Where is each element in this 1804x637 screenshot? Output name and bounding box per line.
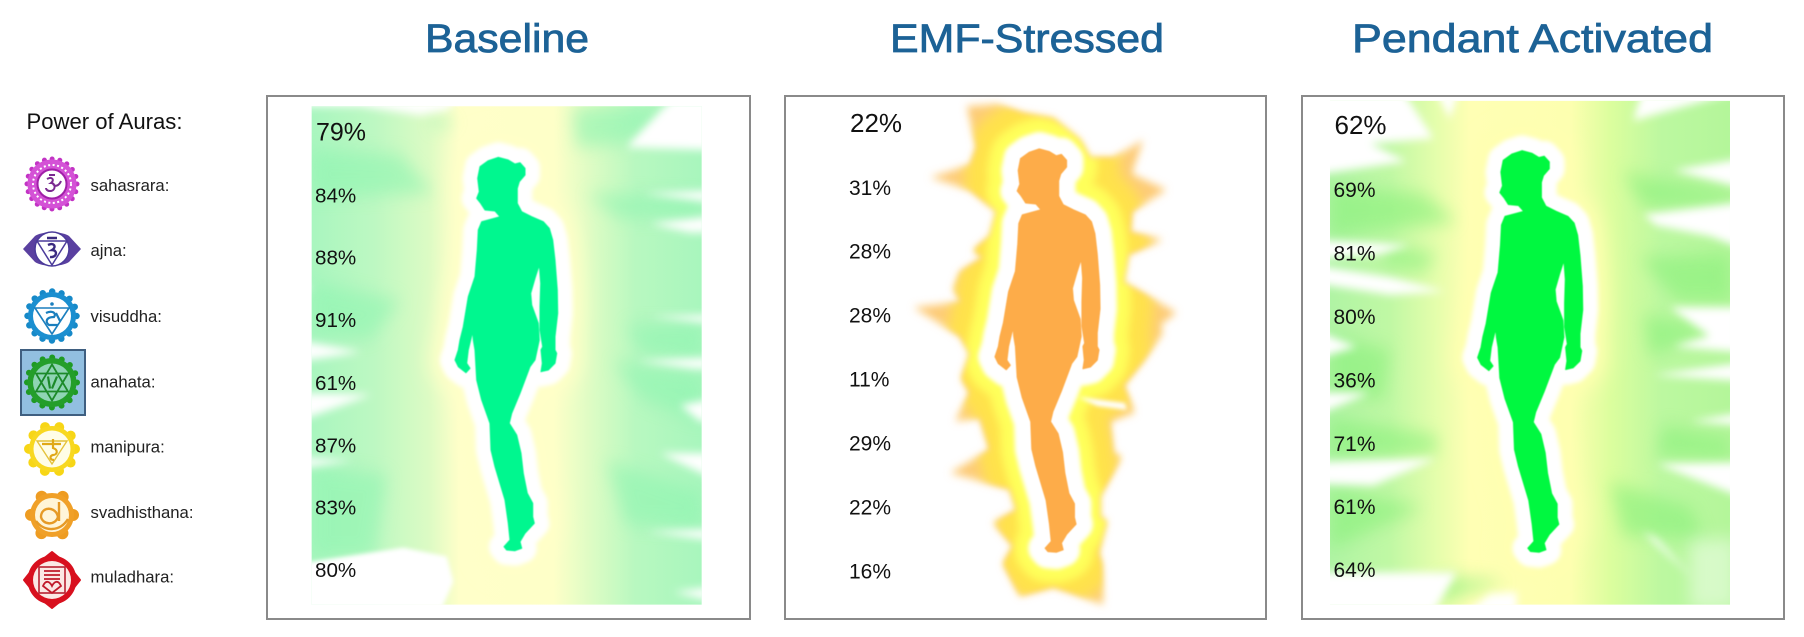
values: baseline percentages: 83% bbox=[315, 496, 356, 520]
values: pendant percentages: 61% bbox=[1334, 496, 1376, 519]
anahata symbol bbox=[27, 358, 77, 408]
values: pendant percentages bbox=[1334, 110, 1387, 582]
silhouette bbox=[995, 149, 1100, 552]
values: pendant percentages: 69% bbox=[1334, 179, 1376, 202]
label: visuddha: visuddha: bbox=[90, 307, 162, 326]
icon: svadhisthana bbox=[30, 493, 74, 537]
values: stressed percentages: 22% bbox=[849, 496, 891, 520]
values: stressed percentages bbox=[849, 108, 902, 584]
panel: Pendant Activated bbox=[1302, 87, 1784, 621]
values: pendant percentages: 64% bbox=[1334, 559, 1376, 582]
panel: Baseline bbox=[267, 94, 750, 621]
panel: EMF-Stressed bbox=[785, 96, 1266, 619]
title: Baseline: Baseline bbox=[425, 17, 589, 61]
notch bbox=[1078, 397, 1127, 410]
label: muladhara: muladhara: bbox=[90, 568, 174, 586]
values: pendant percentages: 36% bbox=[1334, 369, 1376, 392]
values: pendant percentages: 71% bbox=[1334, 433, 1376, 456]
values: baseline percentages: 84% bbox=[315, 184, 356, 207]
values: pendant percentages: 62% bbox=[1334, 110, 1387, 140]
icon: visuddha bbox=[28, 292, 76, 340]
aura: baseline green field bbox=[312, 106, 702, 605]
values: baseline percentages: 80% bbox=[315, 559, 356, 582]
values: stressed percentages: 28% bbox=[849, 241, 891, 264]
values: stressed percentages: 29% bbox=[849, 432, 891, 456]
label: sahasrara: sahasrara: bbox=[90, 176, 169, 195]
halo and figure bbox=[995, 149, 1100, 552]
values: stressed percentages: 31% bbox=[849, 177, 891, 200]
values: baseline percentages bbox=[315, 119, 366, 582]
aura: pendant green field bbox=[1330, 100, 1730, 605]
values: baseline percentages: 87% bbox=[315, 435, 356, 458]
panel frame bbox=[1302, 96, 1784, 619]
values: baseline percentages: 88% bbox=[315, 247, 356, 270]
legend: Power of Auras bbox=[21, 109, 193, 608]
silhouette bbox=[455, 157, 558, 551]
silhouette bbox=[1478, 151, 1583, 552]
panel frame bbox=[785, 96, 1266, 619]
icon: muladhara bbox=[24, 552, 80, 608]
label: anahata: anahata: bbox=[90, 372, 155, 392]
values: stressed percentages: 22% bbox=[850, 108, 902, 138]
values: pendant percentages: 80% bbox=[1334, 306, 1376, 329]
panel frame bbox=[267, 96, 750, 619]
values: baseline percentages: 91% bbox=[315, 309, 356, 332]
values: stressed percentages: 11% bbox=[849, 368, 889, 391]
title: Pendant Activated: Pendant Activated bbox=[1352, 17, 1713, 61]
title: EMF-Stressed: EMF-Stressed bbox=[890, 17, 1164, 61]
values: stressed percentages: 28% bbox=[849, 304, 891, 327]
halo and figure bbox=[1478, 151, 1583, 552]
label: manipura: manipura: bbox=[90, 438, 165, 456]
values: pendant percentages: 81% bbox=[1334, 242, 1376, 265]
label: svadhisthana: svadhisthana: bbox=[90, 503, 193, 522]
icon: sahasrara bbox=[27, 159, 77, 209]
values: baseline percentages: 61% bbox=[315, 372, 356, 395]
icon: manipura bbox=[29, 426, 75, 472]
values: baseline percentages: 79% bbox=[316, 119, 366, 147]
icon: anahata bbox=[21, 350, 85, 415]
legend heading: Power of Auras: bbox=[26, 109, 182, 134]
anahata highlight box bbox=[21, 350, 85, 415]
icon: ajna bbox=[23, 232, 81, 266]
values: stressed percentages: 16% bbox=[849, 561, 891, 584]
label: ajna: ajna: bbox=[90, 241, 127, 260]
aura: stressed yellow-orange spikes bbox=[913, 104, 1177, 605]
halo and figure bbox=[455, 157, 558, 551]
